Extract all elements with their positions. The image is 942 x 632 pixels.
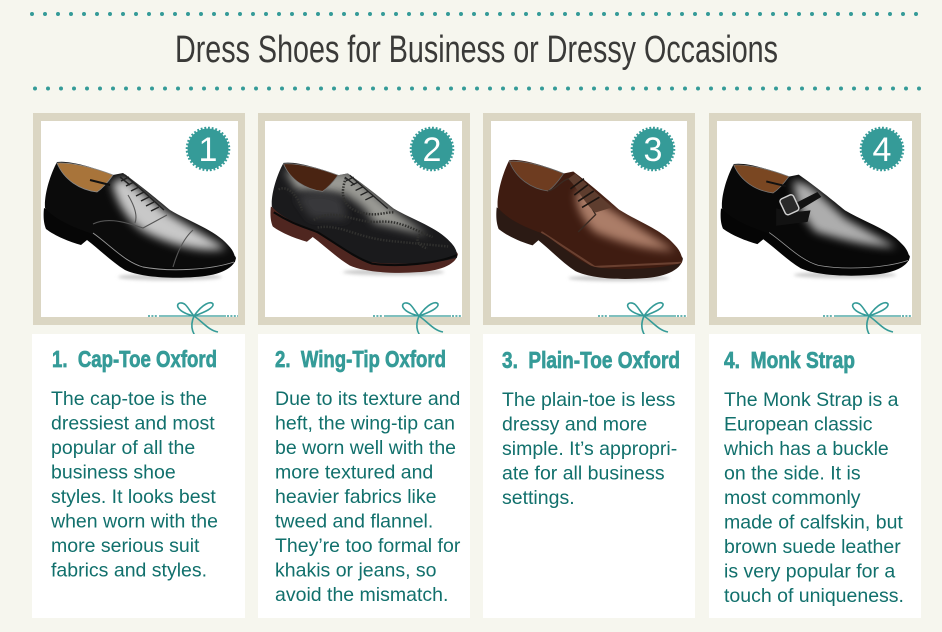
text block: The cap-toe is the (51, 388, 207, 410)
shoe: plain-toe oxford (496, 160, 683, 281)
badge 1 (187, 128, 229, 170)
text block: be worn well with the (275, 437, 456, 459)
heading: 2. Wing-Tip Oxford (275, 346, 446, 372)
panel: plain-toe description (483, 334, 695, 618)
text block: heft, the wing-tip can (275, 412, 455, 434)
ribbon bow (148, 303, 238, 344)
badge 3: 3 (644, 131, 662, 169)
text block: The Monk Strap is a (724, 389, 899, 411)
text block: The plain-toe is less (502, 389, 676, 411)
text block: on the side. It is (724, 462, 861, 484)
panel: monk strap description (709, 334, 921, 618)
shoe: monk strap (721, 164, 910, 278)
text block: which has a buckle (723, 438, 889, 460)
text block: They’re too formal for (275, 535, 461, 557)
text block: ate for all business (502, 462, 665, 484)
text block: when worn with the (50, 510, 218, 532)
badge 2: 2 (423, 131, 441, 169)
panel: plain-toe oxford photo (483, 113, 695, 344)
text block: touch of uniqueness. (724, 585, 904, 607)
text block: business shoe (51, 462, 176, 484)
heading: 1. Cap-Toe Oxford (52, 346, 217, 372)
text block: dressiest and most (51, 412, 215, 434)
text block: popular of all the (51, 437, 195, 459)
text block: simple. It’s appropri- (502, 438, 677, 460)
text block: brown suede leather (724, 536, 901, 558)
badge 4 (861, 128, 903, 170)
text block: more serious suit (51, 535, 200, 557)
ribbon bow (373, 303, 462, 344)
badge 3 (632, 128, 674, 170)
text block: tweed and flannel. (275, 510, 433, 532)
text block: made of calfskin, but (724, 512, 903, 534)
panel: wing-tip oxford photo (258, 113, 470, 344)
text block: khakis or jeans, so (275, 560, 437, 582)
ribbon bow (598, 303, 687, 344)
text block: settings. (502, 487, 575, 509)
text block: European classic (724, 414, 873, 436)
text block: heavier fabrics like (275, 486, 436, 508)
text block: fabrics and styles. (51, 560, 207, 582)
badge 1: 1 (199, 131, 217, 169)
panel: monk strap photo (709, 113, 921, 344)
text block: dressy and more (502, 414, 647, 436)
badge 2 (411, 128, 453, 170)
heading: 3. Plain-Toe Oxford (502, 347, 680, 373)
badge 4: 4 (873, 131, 891, 169)
shoe: cap-toe oxford (44, 162, 236, 280)
text block: more textured and (275, 462, 433, 484)
heading: 4. Monk Strap (724, 347, 855, 373)
text block: avoid the mismatch. (275, 584, 448, 606)
panel: cap-toe description (32, 334, 245, 618)
shoe: wing-tip oxford (270, 163, 458, 275)
panel: wing-tip description (258, 334, 470, 618)
text block: most commonly (724, 487, 861, 509)
text block: Due to its texture and (275, 388, 460, 410)
text block: is very popular for a (724, 560, 895, 582)
panel: cap-toe oxford photo (33, 113, 245, 344)
text block: styles. It looks best (51, 486, 216, 508)
ribbon bow (823, 303, 912, 344)
